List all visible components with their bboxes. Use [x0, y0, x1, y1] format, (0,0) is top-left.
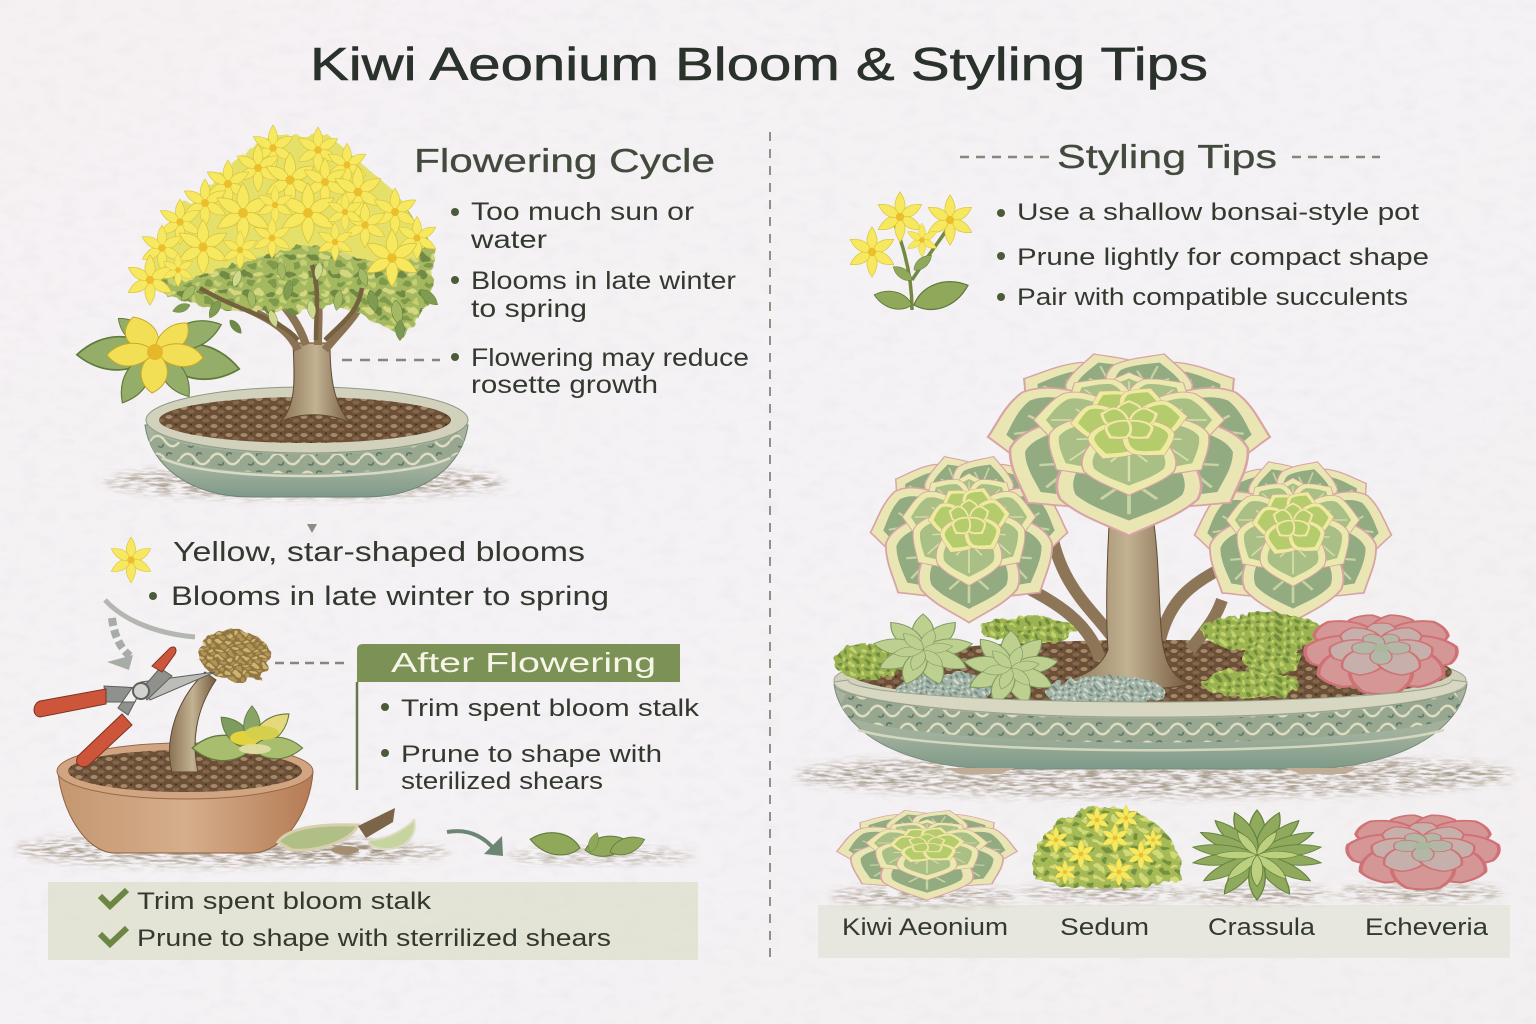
leader line: [275, 662, 347, 664]
icon: crassula sample: [1188, 810, 1332, 903]
text: flowering cycle bullets: water: [470, 226, 547, 254]
icon: check: [100, 928, 127, 944]
illustration: flowering bonsai tree in pot: [105, 125, 505, 498]
flowers: [126, 125, 438, 305]
illustration: discarded leaves: [505, 829, 695, 863]
panel: succulent labels: [818, 905, 1510, 958]
heading: styling tips: Styling Tips: [1057, 138, 1277, 175]
panel: pruning checklist: Trim spent bloom stalk: [137, 888, 432, 915]
heading: after flowering: [357, 644, 680, 682]
heading: after flowering: After Flowering: [391, 647, 656, 678]
pot back and soil: [834, 644, 1466, 716]
panel: succulent labels: Echeveria: [1365, 914, 1489, 941]
arrow: to discarded leaves: [447, 831, 503, 856]
text: styling bullets: Prune lightly for compact shape: [1017, 244, 1429, 271]
text: styling bullets: Use a shallow bonsai-style pot: [1017, 199, 1419, 226]
text: flowering cycle bullets: rosette growth: [471, 371, 658, 399]
text: styling bullets: [997, 199, 1429, 311]
canopy foliage: [160, 135, 436, 337]
stalk: [170, 672, 216, 772]
panel: succulent labels: Crassula: [1208, 914, 1316, 941]
pot body: [145, 425, 468, 497]
text: bloom notes: Blooms in late winter to spring: [171, 581, 609, 611]
companion plants: [834, 612, 1461, 708]
leaves: [171, 261, 441, 341]
icon: echeveria sample: [1335, 812, 1505, 901]
icon: large flower with leaves: [76, 312, 242, 409]
rosette left: [862, 447, 1076, 623]
arrow: curved dashed pruning arrow: [105, 600, 195, 670]
icon: small yellow flower: [109, 537, 153, 583]
text: flowering cycle bullets: Flowering may reduce: [471, 344, 749, 372]
icon: sedum sample: [1020, 805, 1190, 901]
illustration: cut leaf scraps: [270, 808, 450, 860]
text: flowering cycle bullets: [451, 198, 749, 399]
panel: succulent labels: Kiwi Aeonium: [842, 914, 1008, 941]
text: bloom notes: Yellow, star-shaped blooms: [173, 536, 585, 567]
text: flowering cycle bullets: Too much sun or: [471, 198, 694, 226]
text: flowering cycle bullets: Blooms in late winter: [471, 267, 736, 295]
text: bloom notes: [149, 536, 609, 611]
text: styling bullets: Pair with compatible succulents: [1017, 284, 1408, 311]
panel: after flowering: [357, 644, 700, 795]
icon: yellow flower sprig: [848, 192, 974, 316]
panel: after flowering: Prune to shape with: [401, 741, 662, 768]
icon: red pruning shears: [34, 647, 215, 767]
illustration: terracotta pot with pruned plant: [15, 630, 405, 866]
trunk and branches: [205, 265, 365, 424]
text: flowering cycle bullets: to spring: [471, 295, 587, 323]
panel: pruning checklist: [48, 882, 698, 960]
branches over foliage: [200, 265, 362, 340]
panel: after flowering: Trim spent bloom stalk: [401, 695, 700, 722]
trunk and branches: [1022, 510, 1222, 688]
panel: pruning checklist: Prune to shape with sterrilized shears: [137, 925, 611, 952]
title: Kiwi Aeonium Bloom & Styling Tips: [310, 38, 1208, 90]
rosette right: [1186, 453, 1400, 622]
heading: flowering cycle: Flowering Cycle: [414, 142, 715, 179]
dead bloom: [199, 630, 271, 681]
small down arrow: [307, 524, 317, 533]
icon: kiwi aeonium sample: [829, 805, 1025, 905]
panel: after flowering: sterilized shears: [401, 768, 603, 795]
pot body: [834, 684, 1467, 769]
small rosette: [192, 706, 303, 761]
panel: succulent labels: Sedum: [1060, 914, 1149, 941]
icon: check: [100, 890, 127, 906]
rosette main: [976, 344, 1282, 536]
illustration: kiwi aeonium arrangement in bonsai dish: [795, 344, 1515, 797]
leader line: [342, 359, 440, 361]
center dashed divider: [769, 132, 771, 960]
